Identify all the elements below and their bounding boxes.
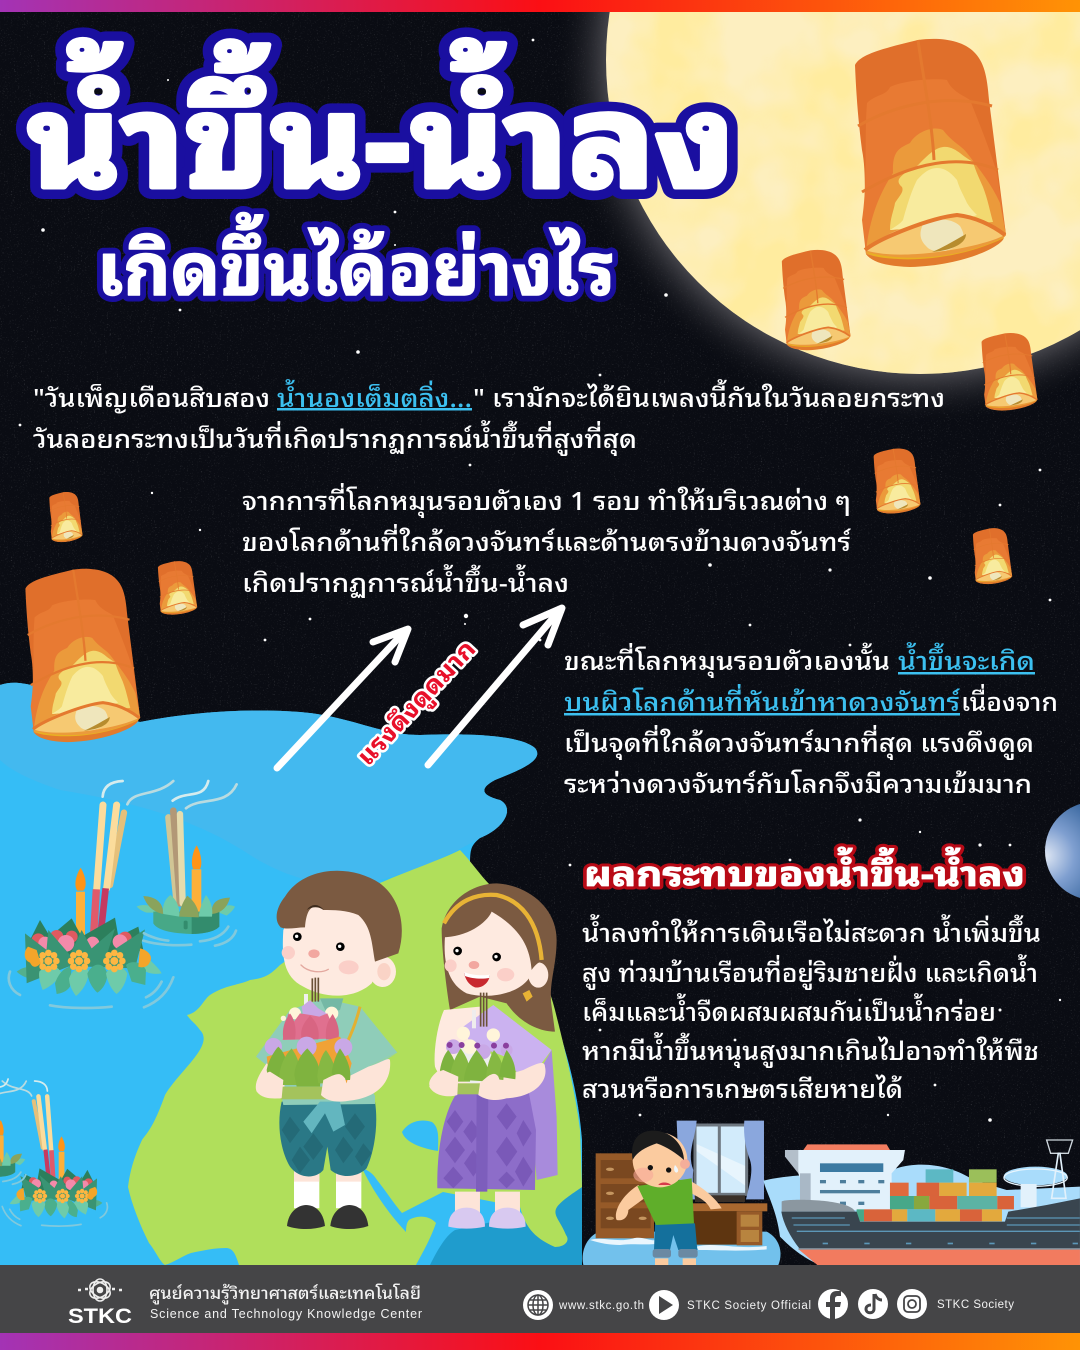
arrow: right gravity arrow xyxy=(428,608,562,765)
title line 2: เกิดขึ้นได้อย่างไร xyxy=(97,206,615,321)
effects paragraph: เค็มและน้ำจืดผสมผสมกันเป็นน้ำกร่อย xyxy=(582,990,996,1030)
title line 1: น้ำขึ้น-น้ำลง xyxy=(27,27,735,232)
moon glow xyxy=(554,0,1080,426)
deep ocean xyxy=(430,1187,582,1265)
lantern small beside left xyxy=(158,561,197,615)
cargo containers xyxy=(857,1169,1014,1221)
title line 2: เกิดขึ้นได้อย่างไร xyxy=(97,206,615,321)
intro text: "วันเพ็ญเดือนสิบสอง xyxy=(33,376,270,416)
lantern far right xyxy=(973,528,1012,584)
lantern right of moon xyxy=(982,333,1037,411)
explanation paragraph: high tide: ระหว่างดวงจันทร์กับโลกจึงมีความเข้มมาก xyxy=(564,762,1032,802)
gradient top bar xyxy=(0,0,1080,12)
website text: www.stkc.go.th xyxy=(558,1300,644,1312)
video channel text: STKC Society Official xyxy=(687,1300,811,1312)
icon: instagram xyxy=(897,1289,927,1319)
lantern mid right xyxy=(874,449,920,514)
lantern small left xyxy=(49,492,83,542)
krathong: bottom-left partial basket xyxy=(0,1079,26,1184)
character: boy holding krathong xyxy=(256,871,402,1229)
desk xyxy=(690,1203,767,1245)
land xyxy=(128,850,582,1265)
character: girl holding krathong xyxy=(429,883,558,1229)
water waves xyxy=(590,1238,767,1251)
heading: effects of tides: ผลกระทบของน้ำขึ้น-น้ำลง xyxy=(584,843,1025,898)
ocean lighter shading xyxy=(0,683,537,884)
label: strong gravity: แรงดึงดูดมาก xyxy=(345,629,484,773)
intro text: น้ำนองเต็มตลิ่ง... xyxy=(277,376,472,416)
explanation paragraph: high tide: บนผิวโลกด้านที่หันเข้าหาดวงจันทร์ xyxy=(564,680,960,720)
explanation paragraph: earth rotation: จากการที่โลกหมุนรอบตัวเอง 1 รอบ ทำให้บริเวณต่าง ๆ xyxy=(242,479,851,519)
heading: effects of tides: ผลกระทบของน้ำขึ้น-น้ำลง xyxy=(584,843,1025,898)
full moon xyxy=(606,0,1080,374)
logo wordmark: STKC xyxy=(68,1305,132,1328)
icon: facebook xyxy=(818,1289,848,1319)
explanation paragraph: earth rotation: ของโลกด้านที่ใกล้ดวงจันทร์และด้านตรงข้ามดวงจันทร์ xyxy=(242,520,851,560)
ocean xyxy=(0,683,582,1265)
footer organisation name xyxy=(149,1278,422,1321)
explanation paragraph: earth rotation: เกิดปรากฏการณ์น้ำขึ้น-น้ำลง xyxy=(242,561,569,601)
container ship xyxy=(763,1140,1080,1265)
small distant planet xyxy=(1045,802,1080,900)
explanation paragraph: high tide: เป็นจุดที่ใกล้ดวงจันทร์มากที่สุด แรงดึงดูด xyxy=(564,721,1034,761)
earth globe xyxy=(0,683,582,1265)
arrow: left gravity arrow xyxy=(277,629,408,768)
radar mast xyxy=(1004,1140,1073,1207)
effects paragraph xyxy=(582,911,1041,1107)
title line 1: น้ำขึ้น-น้ำลง xyxy=(27,27,735,232)
hull xyxy=(781,1198,1080,1265)
explanation paragraph: high tide xyxy=(564,639,1058,802)
window with curtains xyxy=(677,1121,764,1202)
distant sea xyxy=(763,1165,1080,1265)
superstructure xyxy=(785,1144,905,1210)
effects paragraph: หากมีน้ำขึ้นหนุนสูงมากเกินไปอาจทำให้พืช xyxy=(582,1029,1039,1069)
social account text: STKC Society xyxy=(937,1299,1014,1311)
footer band xyxy=(0,1265,1080,1333)
footer organisation name: ศูนย์ความรู้วิทยาศาสตร์และเทคโนโลยี xyxy=(149,1278,421,1305)
intro text: วันลอยกระทงเป็นวันที่เกิดปรากฏการณ์น้ำขึ้นที่สูงที่สุด xyxy=(33,417,637,457)
explanation paragraph: high tide: ขณะที่โลกหมุนรอบตัวเองนั้น xyxy=(564,639,890,679)
effects paragraph: สูง ท่วมบ้านเรือนที่อยู่ริมชายฝั่ง และเกิดน้ำ xyxy=(582,951,1038,991)
intro text xyxy=(33,376,945,457)
effects paragraph: สวนหรือการเกษตรเสียหายได้ xyxy=(582,1067,903,1107)
lantern large top right xyxy=(855,39,1006,267)
lake on land xyxy=(402,1120,438,1151)
explanation paragraph: earth rotation xyxy=(242,479,851,601)
boy figure xyxy=(616,1131,722,1265)
flood scene: boy in flooded house xyxy=(583,1121,781,1265)
krathong: floating basket large xyxy=(9,781,173,1008)
footer organisation name: Science and Technology Knowledge Center xyxy=(150,1307,422,1321)
effects paragraph: น้ำลงทำให้การเดินเรือไม่สะดวก น้ำเพิ่มขึ้น xyxy=(582,911,1041,951)
gradient bottom bar xyxy=(0,1333,1080,1350)
intro text: " เรามักจะได้ยินเพลงนี้กันในวันลอยกระทง xyxy=(473,376,945,416)
explanation paragraph: high tide: น้ำขึ้นจะเกิด xyxy=(898,639,1035,679)
lantern large left xyxy=(25,569,140,742)
explanation paragraph: high tide: เนื่องจาก xyxy=(961,680,1058,720)
footer logo xyxy=(68,1278,132,1328)
dresser xyxy=(596,1153,654,1238)
small stars xyxy=(19,39,1061,1122)
atom icon xyxy=(78,1278,122,1302)
icon: website globe xyxy=(523,1290,553,1320)
krathong: bottom-left basket xyxy=(2,1081,107,1226)
flood water xyxy=(583,1232,781,1265)
lantern under moon xyxy=(782,250,851,350)
icon: video play xyxy=(649,1290,679,1320)
krathong: floating basket small xyxy=(137,781,237,946)
icon: tiktok xyxy=(858,1289,888,1319)
